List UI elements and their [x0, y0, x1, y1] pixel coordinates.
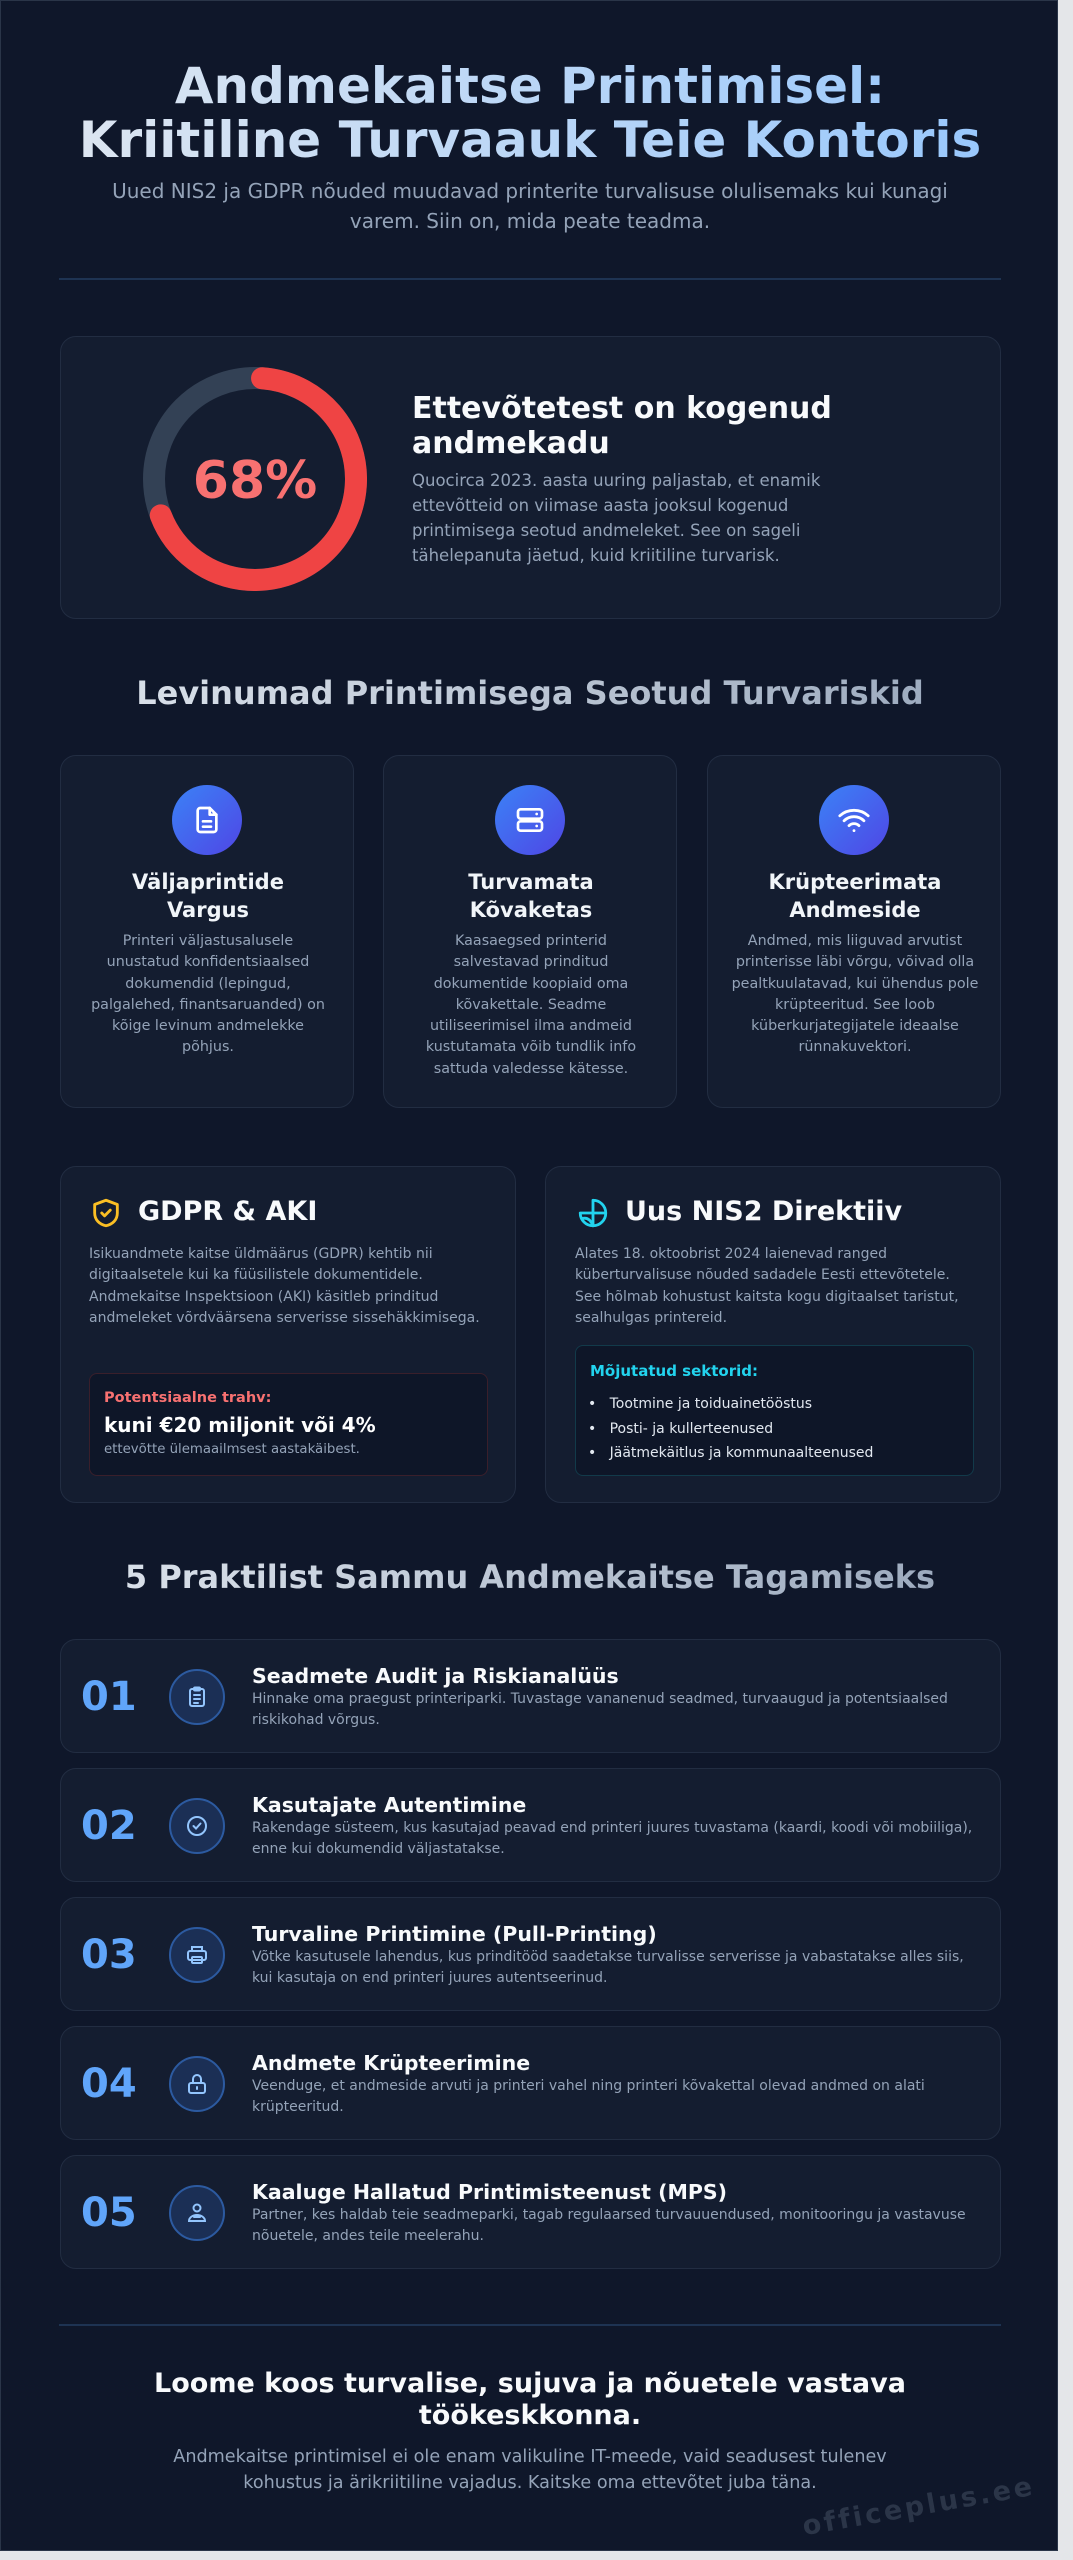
step 01: Hinnake oma praegust printeriparki. Tuvastage vananenud seadmed, turvaaugud ja potentsiaalsed riskikohad võrgus. — [252, 1691, 948, 1728]
step 03: Turvaline Printimine (Pull-Printing) — [252, 1922, 657, 1946]
step 04: 04 — [81, 2061, 137, 2107]
heading GDPR: GDPR & AKI — [138, 1196, 317, 1227]
title — [1, 59, 1059, 167]
callout: fine: Potentsiaalne trahv: — [104, 1390, 271, 1406]
title: Andmekaitse Printimisel: — [175, 57, 885, 115]
watermark: officeplus.ee — [800, 2471, 1037, 2542]
icon: user — [169, 2185, 225, 2241]
step 02: Rakendage süsteem, kus kasutajad peavad end printeri juures tuvastama (kaardi, koodi või mobiiliga), enne kui dokumendid väljastatakse. — [252, 1820, 972, 1857]
panel: risk 3 — [707, 755, 1001, 1108]
step 02 — [60, 1768, 1001, 1882]
risk title — [769, 870, 941, 922]
callout: sectors — [575, 1345, 974, 1476]
step 05: Partner, kes haldab teie seadmeparki, tagab regulaarsed turvauuendused, monitooringu ja vastavuse nõuetele, andes teile meelerahu. — [252, 2207, 966, 2244]
step 05: Kaaluge Hallatud Printimisteenust (MPS) — [252, 2180, 727, 2204]
subtitle: Uued NIS2 ja GDPR nõuded muudavad printerite turvalisuse olulisemaks kui kunagi varem. Siin on, mida peate teadma. — [112, 179, 948, 233]
step 03: 03 — [81, 1932, 137, 1978]
icon: document — [172, 785, 242, 855]
callout: fine: kuni €20 miljonit või 4% — [104, 1413, 376, 1437]
callout: sectors: Mõjutatud sektorid: — [590, 1362, 758, 1380]
icon: printer — [169, 1927, 225, 1983]
panel: risk 1 — [60, 755, 354, 1108]
NIS2 text: Alates 18. oktoobrist 2024 laienevad ranged küberturvalisuse nõuded sadadele Eesti ettevõtetele. See hõlmab kohustust kaitsta kogu digitaalset taristut, sealhulgas printereid. — [575, 1246, 959, 1326]
panel: GDPR — [60, 1166, 516, 1503]
icon: check circle — [169, 1798, 225, 1854]
risk title: Turvamata — [468, 870, 594, 894]
risk text: Kaasaegsed printerid salvestavad prinditud dokumentide koopiaid oma kõvakettale. Seadme utiliseerimisel ilma andmeid kustutamata võib tundlik info sattuda valedesse kätesse. — [426, 933, 636, 1077]
step 02: 02 — [81, 1803, 137, 1849]
GDPR text: Isikuandmete kaitse üldmäärus (GDPR) kehtib nii digitaalsetele kui ka füüsilistele dokumentidele. Andmekaitse Inspektsioon (AKI) käsitleb prinditud andmeleket võrdväärsena serverisse sissehäkkimisega. — [89, 1246, 480, 1326]
risk title: Väljaprintide — [132, 870, 284, 894]
risk title: Vargus — [167, 898, 249, 922]
callout: sectors: • Posti- ja kullerteenused — [588, 1421, 773, 1437]
donut chart 68%: 68% — [193, 451, 317, 511]
icon: lock — [169, 2056, 225, 2112]
step 03 — [60, 1897, 1001, 2011]
icon: shield — [93, 1198, 119, 1228]
heading NIS2: Uus NIS2 Direktiiv — [625, 1196, 902, 1227]
risk title: Andmeside — [789, 898, 921, 922]
risk title — [132, 870, 284, 922]
heading: steps: 5 Praktilist Sammu Andmekaitse Tagamiseks — [125, 1558, 935, 1596]
footer heading: Loome koos turvalise, sujuva ja nõuetele vastava töökeskkonna. — [154, 2368, 906, 2431]
callout: sectors: • Tootmine ja toiduainetööstus — [588, 1396, 812, 1412]
stat text: Quocirca 2023. aasta uuring paljastab, et enamik ettevõtteid on viimase aasta jooksul kogenud printimisega seotud andmeleket. See on sageli tähelepanuta jäetud, kuid kriitiline turvarisk. — [412, 471, 820, 565]
donut chart 68% — [143, 367, 367, 591]
step 03: Võtke kasutusele lahendus, kus prinditööd saadetakse turvalisse serverisse ja vabastatakse alles siis, kui kasutaja on end printeri juures autentseerinud. — [252, 1949, 964, 1986]
step 05 — [60, 2155, 1001, 2269]
panel: NIS2 — [545, 1166, 1001, 1503]
step 04 — [60, 2026, 1001, 2140]
step 05: 05 — [81, 2190, 137, 2236]
callout: sectors: • Jäätmekäitlus ja kommunaalteenused — [588, 1445, 873, 1461]
heading: risks: Levinumad Printimisega Seotud Turvariskid — [136, 674, 924, 712]
callout: fine: ettevõtte ülemaailmsest aastakäibest. — [104, 1442, 360, 1457]
risk title: Kõvaketas — [470, 898, 592, 922]
footer text: Andmekaitse printimisel ei ole enam valikuline IT-meede, vaid seadusest tulenev kohustus ja ärikriitiline vajadus. Kaitske oma ettevõtet juba täna. — [173, 2447, 887, 2493]
step 02: Kasutajate Autentimine — [252, 1793, 526, 1817]
risk text: Printeri väljastusalusele unustatud konfidentsiaalsed dokumendid (lepingud, palgalehed, finantsaruanded) on kõige levinum andmelekke põhjus. — [91, 933, 325, 1055]
step 04: Andmete Krüpteerimine — [252, 2051, 530, 2075]
stat heading: Ettevõtetest on kogenud andmekadu — [412, 391, 832, 461]
icon: clipboard — [169, 1669, 225, 1725]
risk text: Andmed, mis liiguvad arvutist printerisse läbi võrgu, võivad olla pealtkuulatavad, kui ühendus pole krüpteeritud. See loob küberkurjategijatele ideaalse rünnakuvektori. — [732, 933, 978, 1055]
step 01: Seadmete Audit ja Riskianalüüs — [252, 1664, 619, 1688]
panel: stat card — [60, 336, 1001, 619]
callout: fine — [89, 1373, 488, 1476]
step 04: Veenduge, et andmeside arvuti ja printeri vahel ning printeri kõvakettal olevad andmed on alati krüpteeritud. — [252, 2078, 925, 2115]
risk title: Krüpteerimata — [769, 870, 941, 894]
step 01: 01 — [81, 1674, 137, 1720]
icon: wifi — [819, 785, 889, 855]
icon: globe — [578, 1198, 608, 1228]
step 01 — [60, 1639, 1001, 1753]
panel: risk 2 — [383, 755, 677, 1108]
risk title — [468, 870, 594, 922]
icon: server — [495, 785, 565, 855]
title: Kriitiline Turvaauk Teie Kontoris — [79, 111, 981, 169]
